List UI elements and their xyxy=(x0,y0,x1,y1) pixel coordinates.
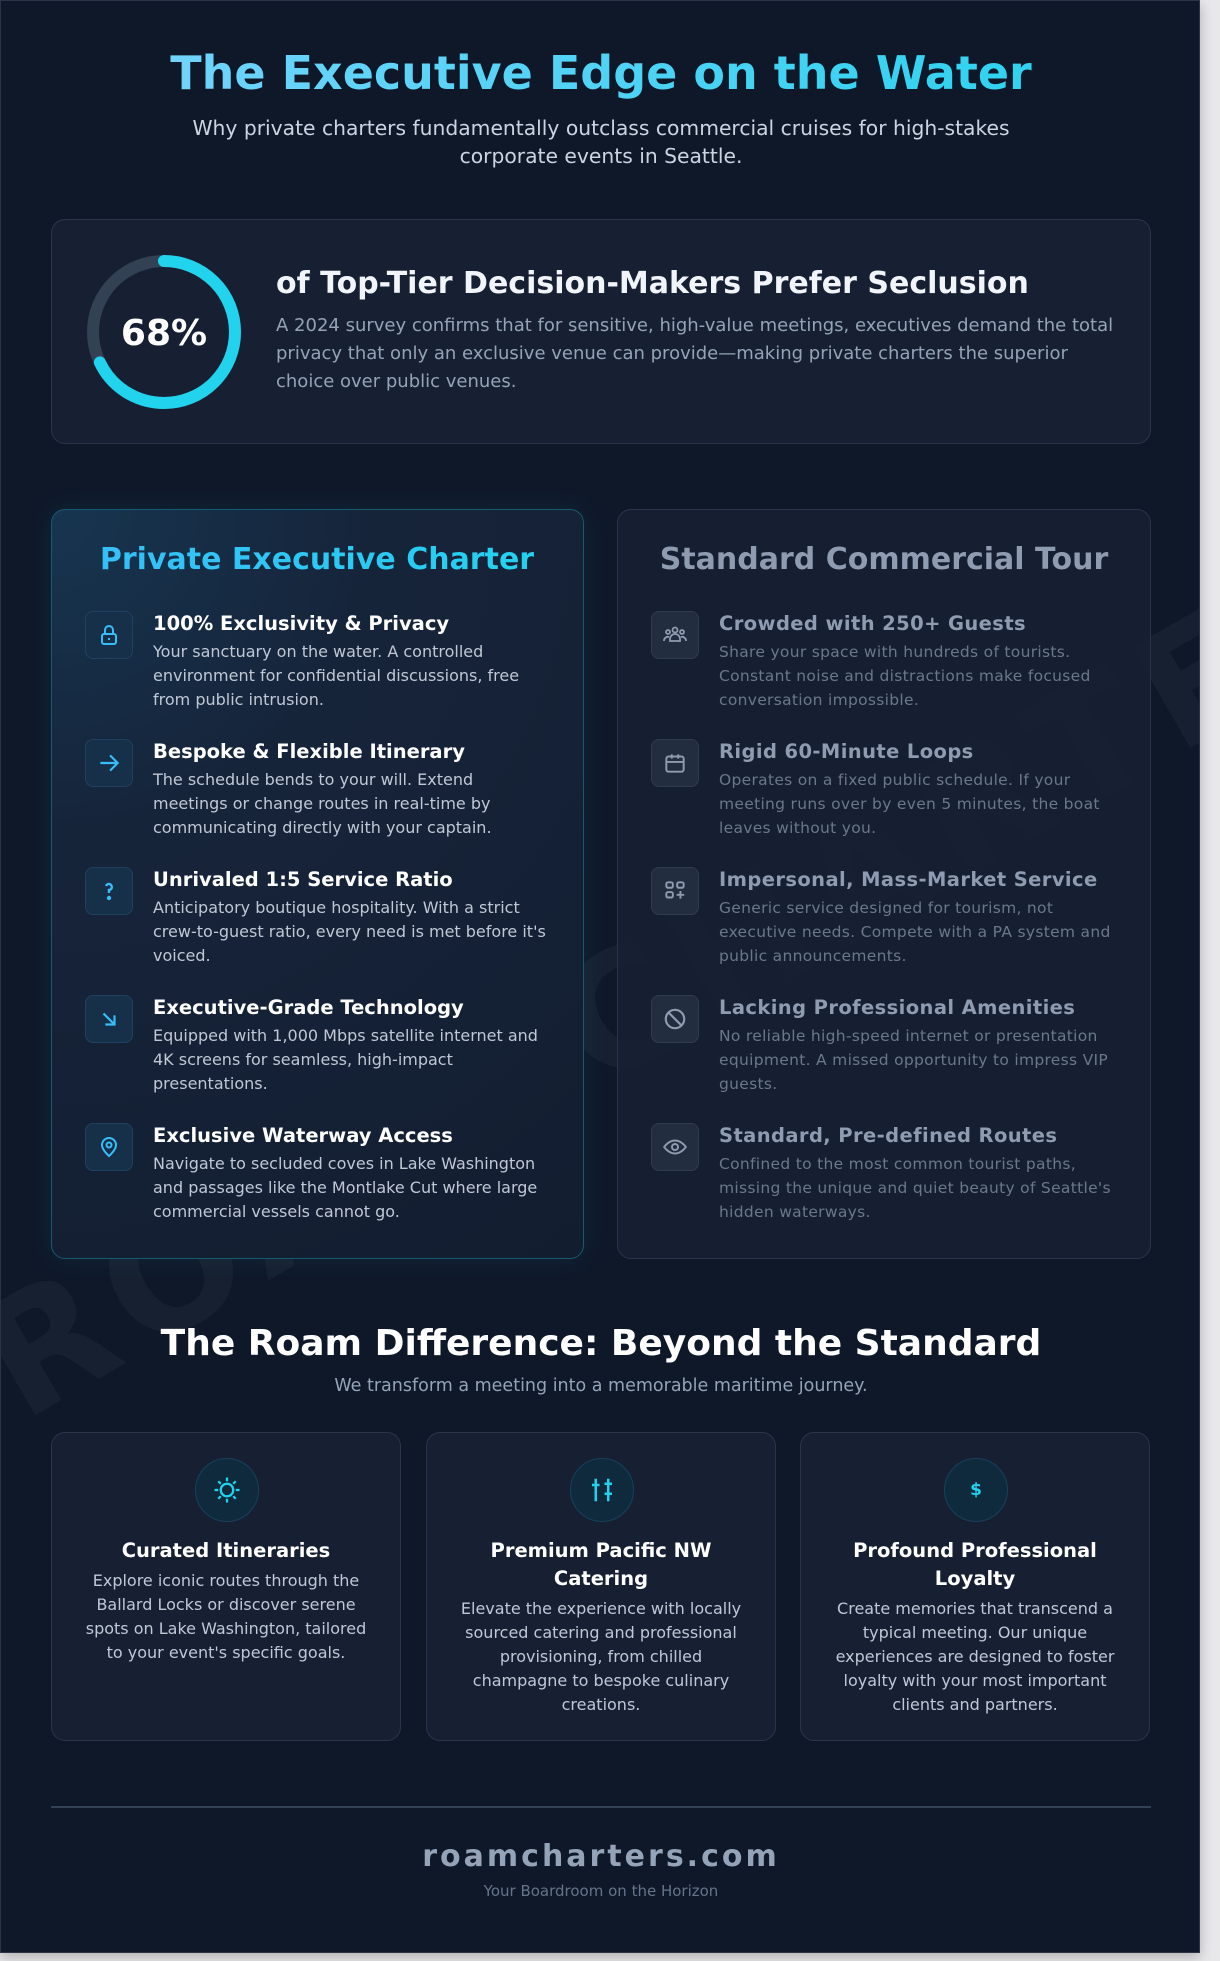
item: itinerary xyxy=(85,739,492,837)
item: crowded: Crowded with 250+ Guests xyxy=(719,612,1026,635)
card: loyalty: Profound Professional Loyalty xyxy=(853,1539,1097,1590)
item: exclusivity: Your sanctuary on the water. A controlled environment for confidential discussions, free from public intrusion. xyxy=(153,642,519,709)
card: curated itineraries xyxy=(51,1432,401,1741)
title: The Executive Edge on the Water xyxy=(170,46,1032,100)
subtitle: Why private charters fundamentally outclass commercial cruises for high-stakes corporate events in Seattle. xyxy=(192,116,1010,168)
icon: group xyxy=(651,611,699,659)
item: routes xyxy=(651,1123,1111,1221)
footer tagline: Your Boardroom on the Horizon xyxy=(484,1882,718,1900)
icon: calendar xyxy=(651,739,699,787)
item: technology xyxy=(85,995,538,1093)
stat heading: of Top-Tier Decision-Makers Prefer Seclusion xyxy=(276,266,1029,301)
card: catering: Premium Pacific NW Catering xyxy=(491,1539,711,1590)
section heading: The Roam Difference: Beyond the Standard xyxy=(161,1323,1041,1364)
item: impersonal xyxy=(651,867,1111,965)
item: amenities: Lacking Professional Amenities xyxy=(719,996,1075,1019)
item: loops: Rigid 60-Minute Loops xyxy=(719,740,974,763)
card: catering: Elevate the experience with locally sourced catering and professional provisioning, from chilled champagne to bespoke culinary creations. xyxy=(461,1599,741,1714)
panel heading: Standard Commercial Tour xyxy=(660,542,1108,577)
icon: ban xyxy=(651,995,699,1043)
item: impersonal: Generic service designed for tourism, not executive needs. Compete with a PA system and public announcements. xyxy=(719,899,1111,965)
footer divider xyxy=(51,1806,1151,1808)
stat text: A 2024 survey confirms that for sensitive, high-value meetings, executives demand the total privacy that only an exclusive venue can provide—making private charters the superior choice over public venues. xyxy=(276,315,1113,392)
icon: eye xyxy=(651,1123,699,1171)
item: amenities xyxy=(651,995,1108,1093)
card: loyalty xyxy=(800,1432,1150,1741)
chart: donut 68%: 68% xyxy=(121,313,207,354)
item: exclusivity: 100% Exclusivity & Privacy xyxy=(153,612,449,635)
icon: dollar xyxy=(944,1458,1008,1522)
item: technology: Executive-Grade Technology xyxy=(153,996,464,1019)
item: loops: Operates on a fixed public schedule. If your meeting runs over by even 5 minutes, the boat leaves without you. xyxy=(719,771,1100,837)
icon: lock xyxy=(85,611,133,659)
item: service ratio xyxy=(85,867,546,965)
card: curated itineraries: Explore iconic routes through the Ballard Locks or discover serene spots on Lake Washington, tailored to your event's specific goals. xyxy=(86,1571,366,1662)
icon: hook xyxy=(85,867,133,915)
panel: private executive charter xyxy=(51,509,584,1259)
item: waterway: Navigate to secluded coves in Lake Washington and passages like the Montlake Cut where large commercial vessels cannot go. xyxy=(153,1154,537,1221)
icon: utensils xyxy=(570,1458,634,1522)
card: catering xyxy=(426,1432,776,1741)
item: technology: Equipped with 1,000 Mbps satellite internet and 4K screens for seamless, high-impact presentations. xyxy=(153,1026,538,1093)
card: curated itineraries: Curated Itineraries xyxy=(122,1539,330,1562)
icon: sun xyxy=(195,1458,259,1522)
panel: standard commercial tour xyxy=(617,509,1151,1259)
section subtitle: We transform a meeting into a memorable maritime journey. xyxy=(334,1376,868,1396)
item: impersonal: Impersonal, Mass-Market Service xyxy=(719,868,1098,891)
card: loyalty: Create memories that transcend a typical meeting. Our unique experiences are designed to foster loyalty with your most important clients and partners. xyxy=(836,1599,1114,1714)
chart: donut 68% xyxy=(87,255,241,409)
item: itinerary: Bespoke & Flexible Itinerary xyxy=(153,740,465,763)
item: crowded: Share your space with hundreds of tourists. Constant noise and distractions make focused conversation impossible. xyxy=(719,643,1091,709)
item: service ratio: Anticipatory boutique hospitality. With a strict crew-to-guest ratio, every need is met before it's voiced. xyxy=(153,898,546,965)
footer brand: roamcharters.com xyxy=(422,1839,780,1874)
panel heading: Private Executive Charter xyxy=(100,542,534,577)
item: service ratio: Unrivaled 1:5 Service Ratio xyxy=(153,868,453,891)
item: routes: Standard, Pre-defined Routes xyxy=(719,1124,1057,1147)
icon: arrow xyxy=(85,739,133,787)
icon: pin xyxy=(85,1123,133,1171)
item: amenities: No reliable high-speed internet or presentation equipment. A missed opportunity to impress VIP guests. xyxy=(719,1027,1108,1093)
icon: dollar: $ xyxy=(970,1480,982,1500)
item: loops xyxy=(651,739,1100,837)
item: crowded xyxy=(651,611,1091,709)
icon: grid plus xyxy=(651,867,699,915)
item: waterway: Exclusive Waterway Access xyxy=(153,1124,453,1147)
item: itinerary: The schedule bends to your will. Extend meetings or change routes in real-time by communicating directly with your captain. xyxy=(153,770,492,837)
panel: stat xyxy=(51,219,1151,444)
item: routes: Confined to the most common tourist paths, missing the unique and quiet beauty of Seattle's hidden waterways. xyxy=(719,1155,1111,1221)
item: exclusivity xyxy=(85,611,519,709)
item: waterway xyxy=(85,1123,537,1221)
icon: arrow down-right xyxy=(85,995,133,1043)
